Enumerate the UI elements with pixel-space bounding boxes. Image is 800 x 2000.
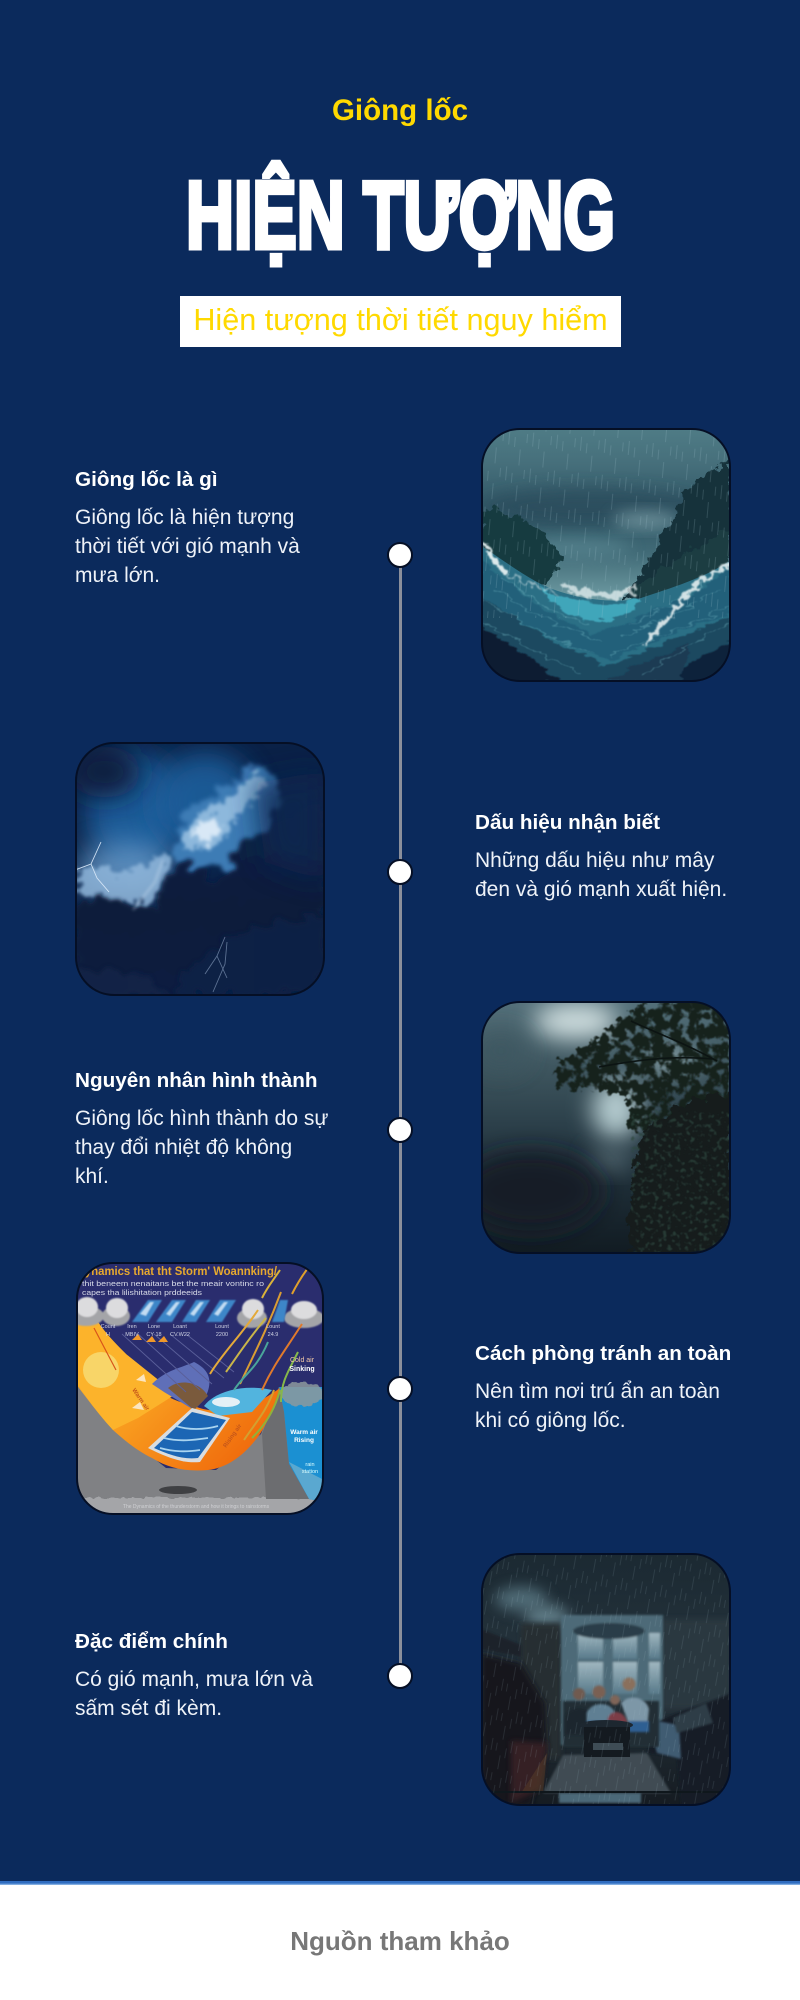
image: storm dynamics diagram: thit beneem nenaitans bet the meair vontinc ro bbox=[82, 1279, 264, 1288]
blue panels bbox=[132, 1300, 288, 1322]
mountains bbox=[152, 1362, 209, 1410]
bottom reflection bbox=[559, 1793, 641, 1803]
text block: Nguyên nhân hình thành: khí. bbox=[75, 1165, 109, 1188]
text block: Đặc điểm chính: Có gió mạnh, mưa lớn và bbox=[75, 1668, 313, 1691]
text block: Cách phòng tránh an toàn: Nên tìm nơi trú ẩn an toàn bbox=[475, 1380, 720, 1403]
wall right of window bbox=[665, 1621, 729, 1706]
text block: Nguyên nhân hình thành: Nguyên nhân hình thành bbox=[75, 1069, 317, 1092]
text block: Dấu hiệu nhận biết: đen và gió mạnh xuất hiện. bbox=[475, 878, 727, 901]
image: storm dynamics diagram: Cold air bbox=[290, 1357, 315, 1364]
image: storm dynamics diagram: Lone bbox=[148, 1324, 160, 1330]
text block: Dấu hiệu nhận biết: Những dấu hiệu như mây bbox=[475, 849, 714, 872]
shadow bbox=[159, 1486, 197, 1494]
image: lightning clouds bbox=[75, 742, 325, 996]
image: storm dynamics diagram: Warm air bbox=[130, 1388, 150, 1413]
tree mass lower bbox=[627, 1093, 731, 1254]
gray ground bbox=[78, 1386, 308, 1500]
image: storm dynamics diagram: Count bbox=[101, 1324, 116, 1330]
right trees bbox=[623, 456, 731, 600]
image: storm dynamics diagram: Loant bbox=[173, 1324, 187, 1330]
text block: Cách phòng tránh an toàn: khi có giông lốc. bbox=[475, 1409, 626, 1432]
image: storm dynamics diagram: Rising bbox=[294, 1437, 314, 1444]
image: storm dynamics diagram: Sinking bbox=[289, 1366, 315, 1373]
image: family sheltering indoors bbox=[481, 1553, 731, 1806]
cloud body bbox=[173, 765, 283, 871]
timeline line bbox=[398, 556, 402, 1676]
orange basin bbox=[76, 1322, 280, 1470]
rain lines bbox=[122, 1334, 234, 1392]
image: stormy sea bbox=[481, 428, 731, 682]
subtitle box: Hiện tượng thời tiết nguy hiểm bbox=[193, 303, 608, 337]
foam bbox=[485, 544, 727, 642]
text block: Nguyên nhân hình thành: Giông lốc hình thành do sự bbox=[75, 1107, 328, 1130]
image: storm dynamics diagram: station bbox=[302, 1469, 318, 1475]
image: storm dynamics diagram: Lount bbox=[215, 1324, 229, 1330]
streams bbox=[94, 1268, 308, 1440]
image: storm dynamics diagram: MBIV bbox=[125, 1332, 139, 1338]
eyebrow heading: Giông lốc bbox=[332, 94, 468, 127]
dark left furniture bbox=[481, 1629, 521, 1657]
left trees bbox=[481, 507, 561, 588]
footer rule bbox=[0, 1881, 800, 1885]
image: storm dynamics diagram: Lount bbox=[266, 1324, 280, 1330]
wall left of window bbox=[521, 1623, 561, 1759]
text block: Dấu hiệu nhận biết: Dấu hiệu nhận biết bbox=[475, 811, 660, 834]
image: storm dynamics diagram: 2200 bbox=[216, 1332, 228, 1338]
text block: Đặc điểm chính: Đặc điểm chính bbox=[75, 1630, 228, 1653]
branch bbox=[599, 1021, 717, 1067]
water bbox=[481, 546, 731, 682]
sun bbox=[83, 1352, 119, 1388]
tree foliage upper bbox=[553, 1001, 731, 1131]
text block: Dấu hiệu nhận biết bbox=[475, 811, 727, 901]
lightning bbox=[75, 842, 227, 992]
dark cloud mass bbox=[77, 828, 323, 976]
window bbox=[561, 1615, 663, 1745]
timeline dot 3 bbox=[387, 1117, 413, 1143]
blue glow bbox=[85, 752, 185, 872]
text block: Nguyên nhân hình thành bbox=[75, 1069, 328, 1188]
right sofa bbox=[648, 1693, 729, 1766]
rug bbox=[543, 1753, 671, 1793]
image: storm dynamics diagram: 24.9 bbox=[268, 1332, 278, 1338]
timeline dot 2 bbox=[387, 859, 413, 885]
image: storm dynamics diagram: CY 18 bbox=[146, 1332, 162, 1338]
footer: Nguồn tham khảo bbox=[290, 1926, 510, 1956]
image: storm dynamics diagram bbox=[76, 1262, 324, 1515]
image: storm dynamics diagram: capes tha lilishitation prddeeids bbox=[82, 1288, 202, 1297]
smoke cloud bbox=[495, 1587, 547, 1611]
wave lines bbox=[481, 578, 731, 676]
text block: Giông lốc là gì: Giông lốc là hiện tượng bbox=[75, 506, 294, 529]
text block: Giông lốc là gì: Giông lốc là gì bbox=[75, 468, 218, 491]
text block: Cách phòng tránh an toàn: Cách phòng tránh an toàn bbox=[475, 1342, 731, 1365]
text block: Nguyên nhân hình thành: thay đổi nhiệt độ không bbox=[75, 1136, 292, 1159]
image: storm dynamics diagram: Iren bbox=[127, 1324, 137, 1330]
timeline dot 1 bbox=[387, 542, 413, 568]
text block: Đặc điểm chính: sấm sét đi kèm. bbox=[75, 1697, 222, 1720]
image: dark sky with tree bbox=[481, 1001, 731, 1254]
sofa back bbox=[563, 1701, 659, 1747]
footer bbox=[0, 1885, 800, 2000]
family bbox=[565, 1678, 649, 1735]
diagram text: ynamics that tht Storm' Woannking/ bbox=[85, 1266, 278, 1278]
text block: Cách phòng tránh an toàn bbox=[475, 1342, 731, 1432]
image: storm dynamics diagram: The Dynamics of the thunderstorm and how it brings to rainstorms bbox=[123, 1504, 270, 1510]
image: storm dynamics diagram: H bbox=[106, 1332, 110, 1338]
image: storm dynamics diagram: Warm air bbox=[290, 1429, 318, 1436]
image: storm dynamics diagram: Rising air bbox=[223, 1423, 244, 1449]
text block: Giông lốc là gì bbox=[75, 468, 300, 587]
table bbox=[586, 1720, 633, 1728]
timeline dot 4 bbox=[387, 1376, 413, 1402]
lakes bbox=[148, 1408, 230, 1462]
timeline dot 5 bbox=[387, 1663, 413, 1689]
text block: Giông lốc là gì: mưa lớn. bbox=[75, 564, 160, 587]
text block: Đặc điểm chính bbox=[75, 1630, 313, 1720]
image: storm dynamics diagram: rain bbox=[305, 1462, 315, 1468]
clouds bbox=[68, 1297, 324, 1328]
right water bbox=[279, 1387, 324, 1502]
text block: Giông lốc là gì: thời tiết với gió mạnh và bbox=[75, 535, 300, 558]
subtitle box bbox=[180, 296, 621, 347]
image: storm dynamics diagram: CV.W22 bbox=[170, 1332, 190, 1338]
